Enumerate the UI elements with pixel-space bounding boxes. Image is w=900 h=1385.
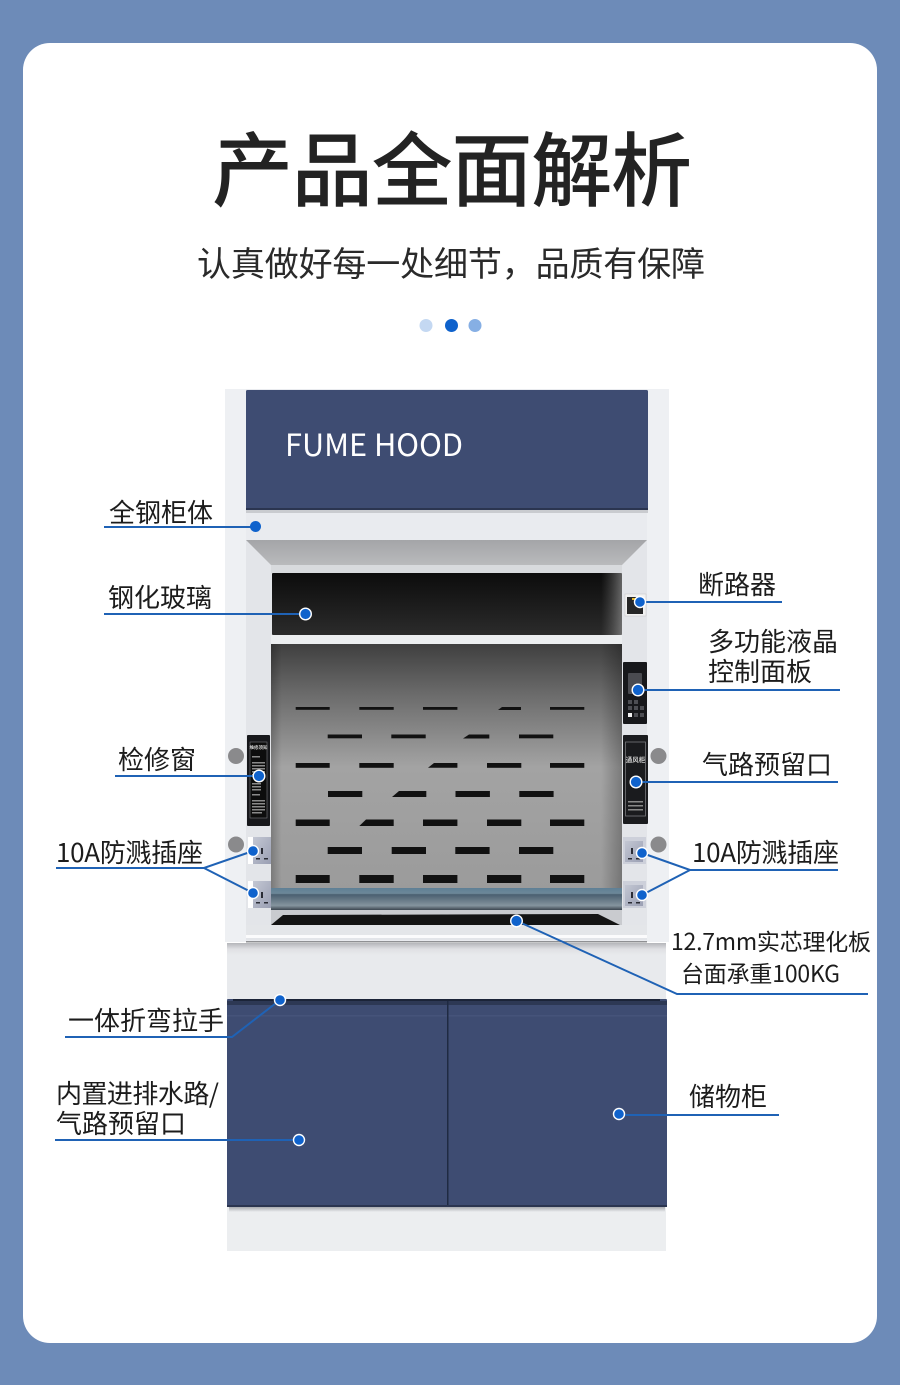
label: multifunction LCD control panel: 多功能液晶	[708, 622, 838, 659]
left inspection window notice: 维修须知	[250, 744, 268, 751]
LCD control panel	[623, 662, 647, 724]
label: left 10A splash-proof socket: 10A防溅插座	[56, 833, 203, 870]
top navy sign panel	[246, 390, 648, 513]
label: one-piece bent handle	[65, 994, 286, 1038]
label: storage cabinet: 储物柜	[689, 1077, 767, 1114]
blue-grey lower sash tray	[271, 888, 622, 910]
label: tempered glass	[104, 578, 311, 620]
right vent control panel	[623, 735, 648, 824]
label: reserved gas port	[630, 745, 838, 788]
label: multifunction LCD control panel	[632, 622, 840, 696]
label: circuit breaker	[634, 565, 782, 608]
angled top hood	[246, 540, 647, 565]
label: multifunction LCD control panel: 控制面板	[708, 652, 812, 689]
label: 12.7mm solid core worktop: 12.7mm实芯理化板	[671, 923, 871, 957]
label: one-piece bent handle: 一体折弯拉手	[68, 1001, 224, 1038]
label: 12.7mm solid core worktop	[511, 915, 871, 994]
opening frame	[246, 540, 647, 940]
circuit breaker box	[625, 594, 646, 616]
label: storage cabinet	[614, 1077, 779, 1120]
title: 产品全面解析	[212, 107, 692, 224]
left inspection window notice	[247, 735, 270, 826]
label: right 10A splash-proof socket	[636, 833, 839, 900]
label: inspection window	[115, 740, 265, 782]
right vent control panel: 通风柜	[626, 754, 646, 764]
label: tempered glass: 钢化玻璃	[108, 578, 212, 615]
subtitle: 认真做好每一处细节，品质有保障	[197, 237, 705, 286]
label: right 10A splash-proof socket: 10A防溅插座	[692, 833, 839, 870]
storage cabinet doors	[227, 999, 667, 1212]
glass upper panel	[272, 573, 622, 635]
label: built-in water and gas routes	[55, 1074, 304, 1146]
label: full steel body	[104, 493, 261, 532]
white sash bar	[271, 635, 622, 644]
lower work-surface slit	[271, 910, 622, 926]
label: left 10A splash-proof socket	[56, 833, 258, 898]
label: inspection window: 检修窗	[118, 740, 196, 777]
label: built-in water and gas routes: 气路预留口	[56, 1104, 186, 1141]
lower base section	[227, 943, 666, 1251]
sockets	[248, 837, 646, 908]
ventilation slots	[296, 707, 584, 883]
label: reserved gas port: 气路预留口	[702, 745, 832, 782]
sign text: FUME HOOD	[285, 420, 463, 465]
fume hood cabinet illustration	[225, 389, 669, 1251]
label: circuit breaker: 断路器	[698, 565, 776, 602]
upper body frame	[225, 389, 669, 942]
pagination dots	[420, 319, 482, 332]
label: built-in water and gas routes: 内置进排水路/	[56, 1074, 219, 1111]
grey round plugs	[228, 748, 666, 852]
interior back wall	[271, 644, 622, 890]
label: full steel body: 全钢柜体	[109, 493, 213, 530]
label: 12.7mm solid core worktop: 台面承重100KG	[681, 955, 840, 989]
sill	[246, 925, 647, 938]
